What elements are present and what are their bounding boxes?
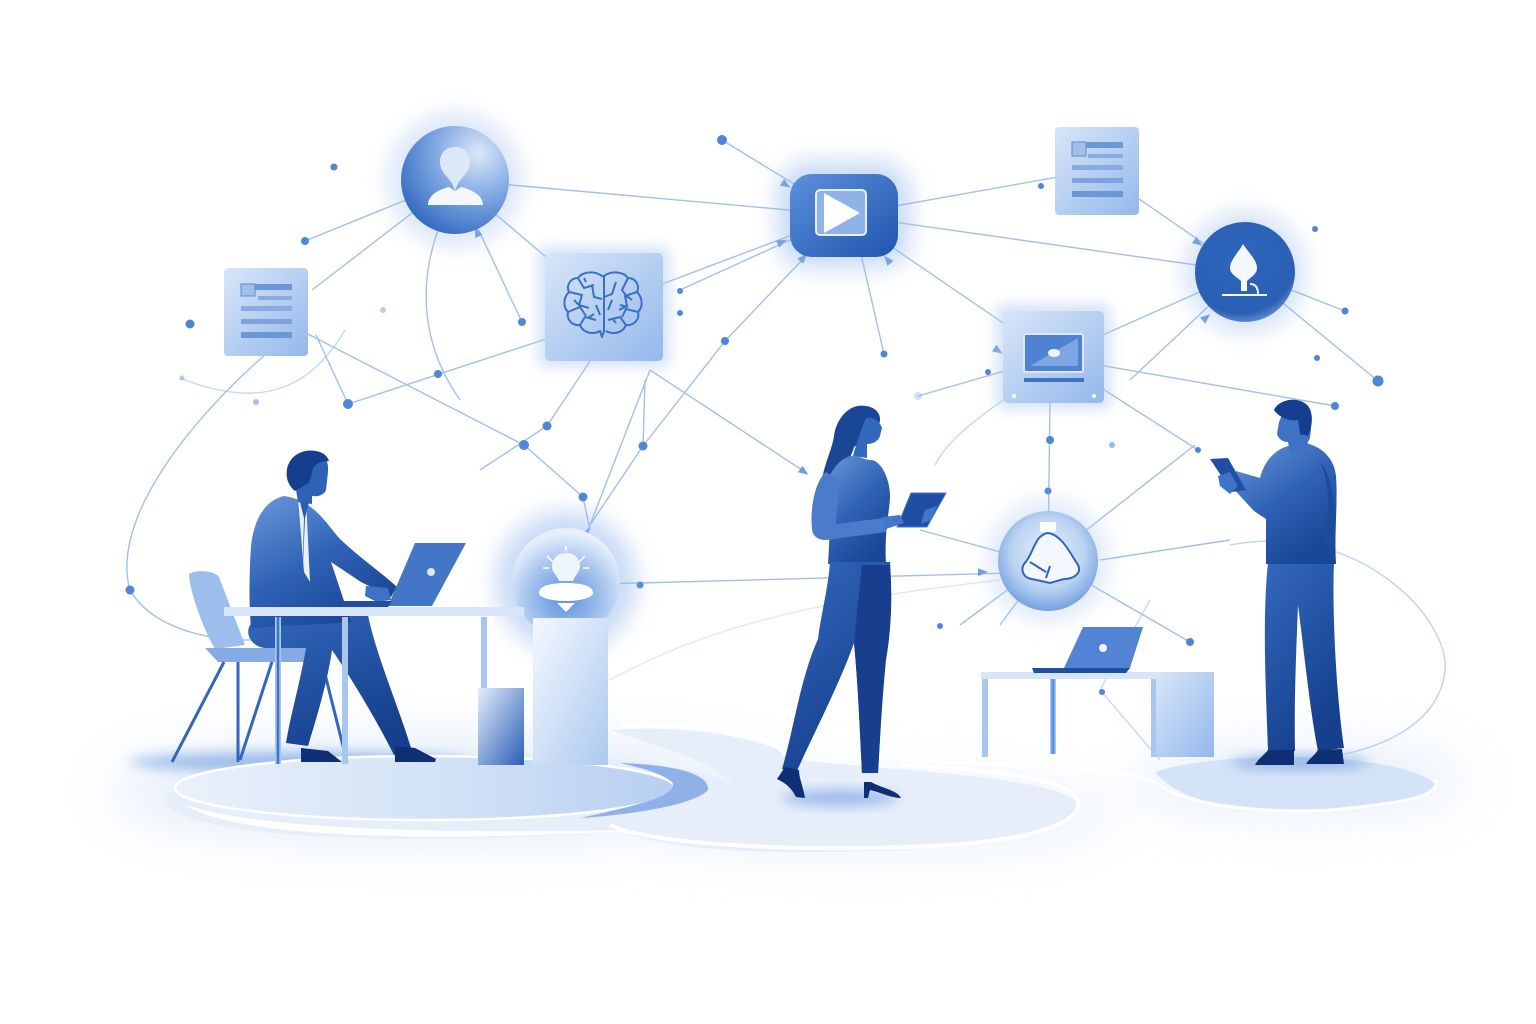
tablet (897, 493, 946, 527)
laptop (338, 543, 466, 607)
legs (248, 612, 412, 755)
network nodes (126, 135, 1384, 695)
torso (1230, 442, 1337, 564)
tablet (1210, 458, 1246, 492)
chair (172, 571, 347, 762)
connection arrowheads (471, 179, 1213, 576)
icon: video play card (778, 162, 910, 268)
person: standing man with tablet (1210, 400, 1344, 765)
icon: lightbulb orb (496, 512, 636, 652)
hand (882, 506, 937, 529)
legs (1265, 562, 1344, 751)
icon: document card left (224, 268, 308, 356)
arm (812, 472, 886, 540)
icon: bell orb (988, 501, 1108, 621)
laptop (1032, 627, 1143, 673)
plinth (533, 618, 608, 765)
person: walking woman with tablet (777, 406, 946, 798)
icon: document card top right (1055, 127, 1139, 215)
torso (825, 456, 890, 564)
icon: laptop card (995, 303, 1112, 410)
shoes (777, 767, 901, 798)
hand (365, 586, 391, 602)
icon: person orb (389, 114, 521, 246)
shoes (301, 746, 436, 762)
floor platforms (130, 726, 1436, 852)
storage box (478, 688, 524, 765)
small table with laptop and box (981, 627, 1214, 757)
icon: dark orb right (1185, 212, 1305, 332)
network connection lines (127, 140, 1445, 760)
desk with laptop (224, 543, 608, 765)
torso (250, 496, 397, 628)
floor glow (110, 745, 1470, 850)
hand (1218, 472, 1238, 494)
shoes (1255, 749, 1344, 765)
head (1277, 408, 1311, 454)
person: seated man at desk (172, 450, 436, 762)
head (290, 452, 328, 504)
hair (822, 406, 880, 481)
platform: right (900, 755, 1436, 811)
icon: brain card (537, 246, 671, 368)
platform: centre (610, 726, 1079, 852)
legs (782, 562, 891, 773)
platform: left (130, 752, 735, 839)
